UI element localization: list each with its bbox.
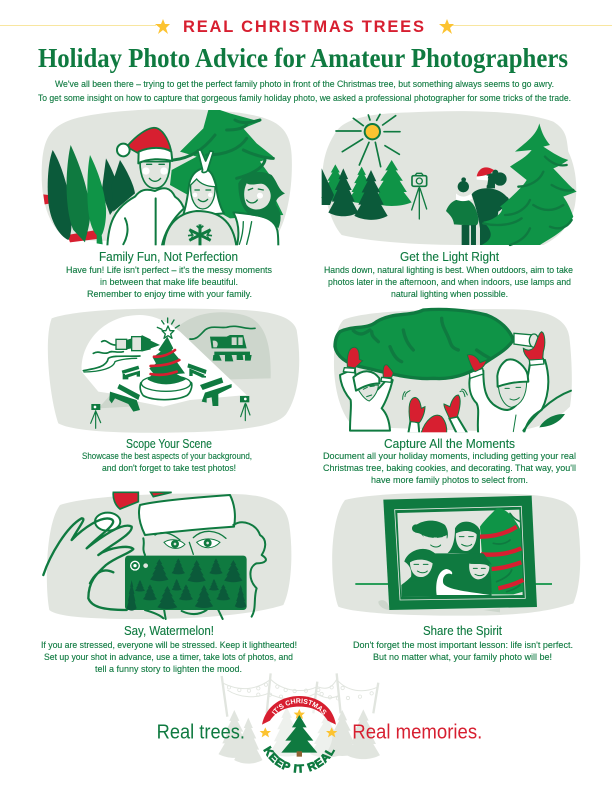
caption: share the spirit: Don't forget the most important lesson: life isn't perfect. <box>353 640 573 650</box>
panel: watermelon <box>43 492 291 619</box>
stripes red <box>43 194 102 242</box>
header: Real Christmas Trees <box>0 18 612 36</box>
big fir tree <box>482 123 577 245</box>
picture frame <box>383 496 537 610</box>
family in photo <box>401 521 492 597</box>
panel: scope <box>48 308 299 433</box>
caption: moments: Document all your holiday moments, including getting your real <box>323 451 576 461</box>
badge: keep it real: KEEP IT REAL <box>263 746 336 773</box>
santa hat <box>95 492 235 535</box>
intro text: To get some insight on how to capture that gorgeous family holiday photo, we asked a professional photographer for some tricks of the trade. <box>38 93 571 103</box>
clip strip <box>90 245 297 250</box>
tree in photo <box>480 508 523 594</box>
caption: family fun: Family Fun, Not Perfection <box>99 250 238 264</box>
face and hair <box>143 522 266 619</box>
title: Holiday Photo Advice for Amateur Photographers <box>38 43 568 73</box>
caption: scope: Showcase the best aspects of your background, <box>82 451 252 461</box>
red mittens on tree <box>347 332 545 377</box>
city and path <box>83 335 160 372</box>
excavator scene <box>190 326 255 361</box>
person right <box>469 358 548 435</box>
caption: moments <box>323 437 576 485</box>
camera right <box>240 396 250 421</box>
tree being carried <box>335 309 539 379</box>
string lights and posts <box>222 673 378 717</box>
caption: light: natural lighting when possible. <box>391 289 508 299</box>
caption: watermelon: Set up your shot in advance, use a timer, take lots of photos, and <box>44 652 293 662</box>
caption: share the spirit: Share the Spirit <box>423 624 502 638</box>
decorated tree <box>147 318 186 384</box>
frame shadow <box>378 600 500 612</box>
child with mittens <box>403 389 467 433</box>
caption: watermelon <box>41 624 297 674</box>
caption: scope: Scope Your Scene <box>126 437 212 451</box>
caption: moments: have more family photos to select from. <box>371 475 528 485</box>
panel: light <box>321 111 577 245</box>
third person <box>233 172 285 247</box>
camera on tripod <box>412 173 427 219</box>
slogan: real trees: Real trees. <box>157 720 245 743</box>
badge: keep it real <box>260 696 338 773</box>
caption: light <box>324 250 573 299</box>
caption: light: Hands down, natural lighting is best. When outdoors, aim to take <box>324 265 573 275</box>
hand <box>43 518 133 610</box>
caption: family fun: Have fun! Life isn't perfect – it's the messy moments <box>66 265 272 275</box>
intro text <box>38 79 571 103</box>
caption: watermelon: If you are stressed, everyone will be stressed. Keep it lighthearted! <box>41 640 297 650</box>
panel: share the spirit <box>332 493 580 616</box>
panel background <box>334 309 572 432</box>
caption: share the spirit: But no matter what, your family photo will be! <box>373 652 552 662</box>
shaded areas <box>98 312 271 408</box>
caption: share the spirit <box>353 624 573 662</box>
branch bottom right <box>523 391 571 431</box>
man in santa hat <box>107 128 184 247</box>
footer art <box>157 673 482 773</box>
clip strip <box>343 432 570 437</box>
caption: scope: and don't forget to take test photos! <box>102 463 236 473</box>
panel background <box>47 493 291 619</box>
sun <box>336 114 400 167</box>
camera left <box>91 404 101 428</box>
back trees <box>321 160 412 220</box>
girl with bunny ears <box>163 150 237 248</box>
caption: family fun: in between that make life beautiful. <box>100 277 238 287</box>
caption: moments: Christmas tree, baking cookies, and decorating. That way, you'll <box>323 463 576 473</box>
spotlight <box>82 315 247 407</box>
snowflake <box>188 224 212 248</box>
caption: family fun: Remember to enjoy time with your family. <box>87 289 252 299</box>
panel: family fun <box>42 109 297 250</box>
phone with fir pattern <box>125 556 247 611</box>
panel: moments <box>334 309 572 437</box>
background trees <box>218 707 380 764</box>
small trees <box>48 145 135 244</box>
caption: watermelon: Say, Watermelon! <box>124 624 214 638</box>
caption: light: Get the Light Right <box>400 250 499 264</box>
panel background <box>42 109 292 245</box>
panel background <box>332 493 580 616</box>
caption: light: photos later in the afternoon, and when indoors, use lamps and <box>328 277 571 287</box>
table line <box>355 581 552 586</box>
person left <box>340 368 393 431</box>
caption: moments: Capture All the Moments <box>384 437 515 451</box>
family silhouettes <box>446 167 509 245</box>
caption: watermelon: tell a funny story to lighten the mood. <box>95 664 242 674</box>
panel background <box>48 308 299 433</box>
panel background <box>322 111 576 245</box>
caption: family fun <box>66 250 272 299</box>
header: Real Christmas Trees: REAL CHRISTMAS TREES <box>183 18 424 36</box>
slogan: real memories: Real memories. <box>352 720 482 743</box>
badge: keep it real: IT'S CHRISTMAS <box>272 698 326 715</box>
planter <box>140 375 192 400</box>
big fir tree <box>170 110 283 218</box>
intro text: We've all been there – trying to get the perfect family photo in front of the Christmas tree, but something always seems to go awry. <box>55 79 554 89</box>
benches <box>109 363 232 412</box>
caption: scope <box>82 437 252 473</box>
